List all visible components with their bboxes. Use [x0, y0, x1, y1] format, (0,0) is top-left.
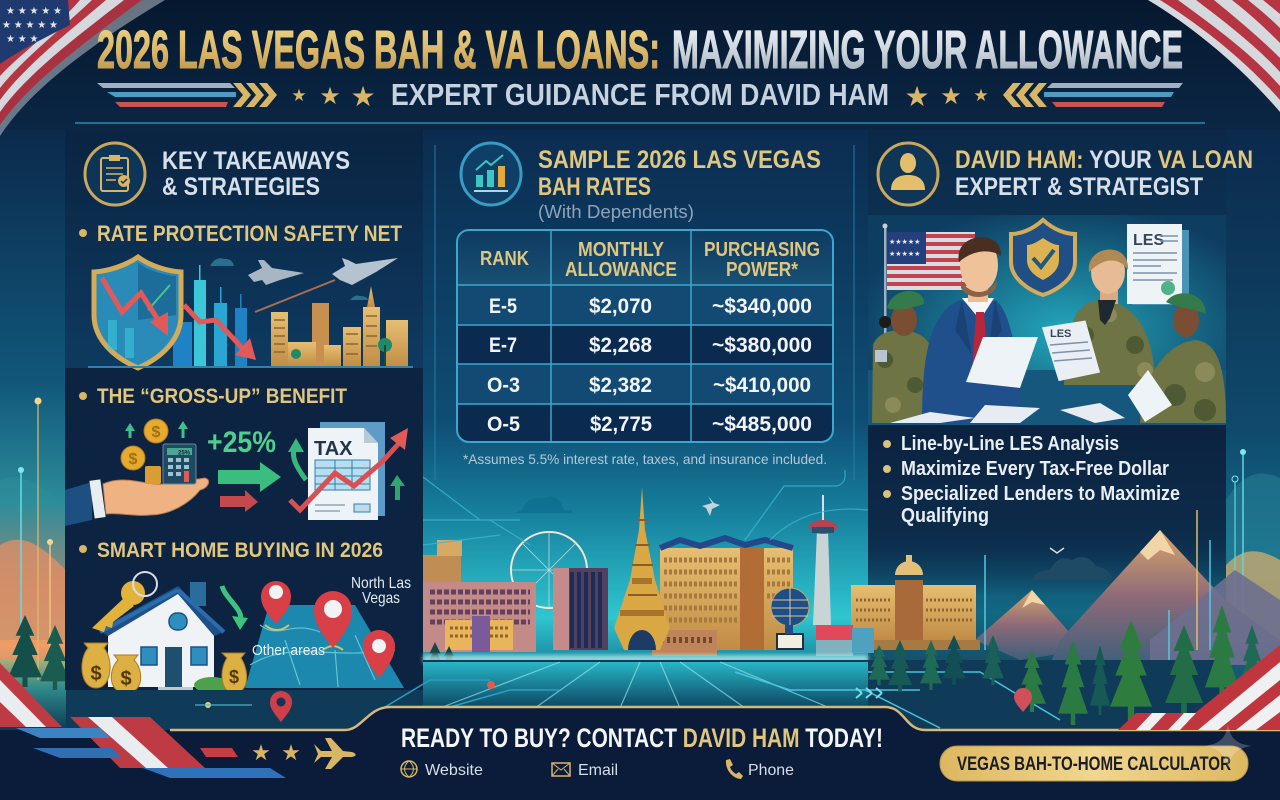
subtitle: EXPERT GUIDANCE FROM DAVID HAM [391, 77, 889, 112]
illustration: gross-up hand, calculator, tax form: $ [129, 451, 138, 468]
illustration: house, keys, map pins: $ [90, 663, 102, 685]
illustration: David Ham advising service members: ★★★★★ [889, 250, 920, 258]
title: 2026 LAS VEGAS BAH & VA LOANS: [97, 20, 660, 80]
bullet list: David Ham services: Line-by-Line LES Analysis [901, 433, 1119, 455]
road with circuit lines [66, 660, 1226, 730]
table: BAH rates: $2,070 [589, 295, 652, 318]
subtitle ornament right: ★ [904, 81, 930, 112]
heading: David Ham [955, 146, 1253, 201]
heading: sample rates [538, 146, 821, 222]
item heading: smart home buying: SMART HOME BUYING IN 2026 [97, 539, 383, 562]
table: BAH rates: ~$410,000 [713, 374, 811, 397]
contact: website: Website [425, 762, 483, 779]
illustration: house, keys, map pins: $ [229, 667, 239, 687]
heading: sample rates: SAMPLE 2026 LAS VEGAS [538, 146, 821, 174]
mountains [975, 510, 1280, 665]
right panel background [868, 130, 1226, 663]
subtitle ornament left: ★ [291, 86, 307, 105]
contact: phone: Phone [748, 762, 794, 779]
illustration: rate protection shield, skyline, jets [88, 257, 413, 368]
contact: email [552, 762, 618, 779]
illustration: house, keys, map pins: North Las [351, 575, 411, 592]
illustration: house, keys, map pins: Other areas [252, 642, 325, 659]
landmark: Bellagio-style hotel [845, 555, 980, 650]
illustration: David Ham advising service members: LES [1050, 328, 1071, 340]
table: BAH rates: E-7 [489, 334, 517, 357]
footer band [0, 707, 1280, 800]
illustration: gross-up hand, calculator, tax form: +25% [207, 426, 276, 459]
table: BAH rates: O-3 [487, 374, 520, 397]
illustration: David Ham advising service members [868, 215, 1226, 425]
table: BAH rates: MONTHLY [578, 239, 665, 261]
heading: key takeaways: KEY TAKEAWAYS [162, 147, 350, 175]
table: BAH rates: ALLOWANCE [565, 259, 677, 281]
bullet list: David Ham services [883, 433, 1180, 527]
flag: top left corner: ★ ★ ★ ★ ★ [6, 6, 62, 17]
landmark: left casino buildings and ferris wheel [423, 532, 608, 682]
stars and plane ornament [251, 738, 356, 769]
right scenic strip [1226, 130, 1280, 730]
table: BAH rates [457, 230, 833, 442]
stars and plane ornament: ★ [281, 740, 301, 765]
pine trees [868, 605, 1264, 725]
flag: top right corner [1148, 0, 1280, 112]
item heading: gross-up: THE “GROSS-UP” BENEFIT [97, 385, 347, 408]
table: BAH rates: $2,382 [589, 374, 652, 397]
illustration: house, keys, map pins: Vegas [362, 590, 400, 607]
bullet list: David Ham services: Maximize Every Tax-Free Dollar [901, 458, 1169, 480]
icon: person badge [878, 143, 938, 205]
contact: email: Email [578, 762, 618, 779]
illustration: gross-up hand, calculator, tax form: TAX [314, 438, 353, 460]
illustration: David Ham advising service members: ★★★★★ [889, 238, 920, 246]
contact: website [401, 761, 483, 779]
footnote: *Assumes 5.5% interest rate, taxes, and insurance included. [463, 451, 827, 467]
ribbon: bottom right [1118, 645, 1280, 730]
table: BAH rates: ~$380,000 [712, 334, 812, 357]
table: BAH rates: $2,268 [589, 334, 652, 357]
center panel background [423, 130, 868, 660]
heading: David Ham: DAVID HAM: YOUR VA LOAN [955, 146, 1253, 174]
subtitle ornament right: ★ [973, 86, 989, 105]
illustration: gross-up hand, calculator, tax form: 25% [178, 450, 191, 456]
table: BAH rates: E-5 [489, 295, 517, 318]
clouds [514, 496, 572, 513]
left panel background [65, 130, 423, 690]
icon: chart badge [461, 143, 521, 205]
landmark: golden hotel [652, 538, 793, 656]
heading: key takeaways: & STRATEGIES [162, 173, 320, 201]
heading: sample rates: BAH RATES [538, 173, 651, 201]
item heading: rate protection: RATE PROTECTION SAFETY NET [97, 221, 402, 246]
subtitle ornament left: ★ [319, 83, 341, 110]
call to action heading: READY TO BUY? CONTACT DAVID HAM TODAY! [401, 723, 883, 753]
bullet list: David Ham services: Qualifying [901, 505, 989, 527]
flag: top left corner: ★ ★ ★ [6, 34, 38, 45]
illustration: house, keys, map pins [82, 572, 411, 693]
heading: key takeaways [162, 147, 350, 201]
subtitle ornament left: ★ [350, 81, 376, 112]
landmark: Eiffel tower [614, 487, 670, 650]
subtitle ornament left [97, 81, 376, 112]
flag: top left corner: ★ ★ ★ ★ ★ [2, 20, 58, 31]
illustration: David Ham advising service members: LES [1133, 232, 1164, 249]
table: BAH rates: ~$340,000 [712, 295, 812, 318]
flag: top left corner [0, 0, 165, 136]
contact: phone [726, 759, 794, 779]
table: BAH rates: $2,775 [590, 413, 652, 436]
sparkle watermark [1204, 724, 1252, 768]
left scenic strip [0, 130, 70, 730]
heading: sample rates: (With Dependents) [538, 202, 694, 222]
heading: David Ham: EXPERT & STRATEGIST [955, 173, 1203, 201]
bullet list: David Ham services: Specialized Lenders to Maximize [901, 483, 1180, 505]
ground glow [423, 655, 868, 663]
table: BAH rates: PURCHASING [704, 239, 820, 261]
table: BAH rates: POWER* [726, 259, 798, 281]
glowing circuit lines above skyline [423, 470, 868, 545]
illustration: gross-up hand, calculator, tax form [65, 419, 408, 526]
table: BAH rates: O-5 [487, 413, 520, 436]
illustration: house, keys, map pins: $ [120, 668, 132, 690]
subtitle ornament right: ★ [940, 83, 962, 110]
illustration: gross-up hand, calculator, tax form: $ [152, 424, 161, 441]
landmark: Stratosphere and sphere sign [702, 495, 874, 656]
subtitle ornament right [904, 81, 1183, 112]
table: BAH rates: RANK [480, 248, 529, 270]
button: calculator [940, 746, 1248, 781]
ribbon: bottom left [0, 663, 286, 778]
table: BAH rates: ~$485,000 [712, 413, 812, 436]
stars and plane ornament: ★ [251, 740, 271, 765]
map pins on road [270, 688, 1032, 722]
icon: clipboard badge [85, 143, 145, 205]
